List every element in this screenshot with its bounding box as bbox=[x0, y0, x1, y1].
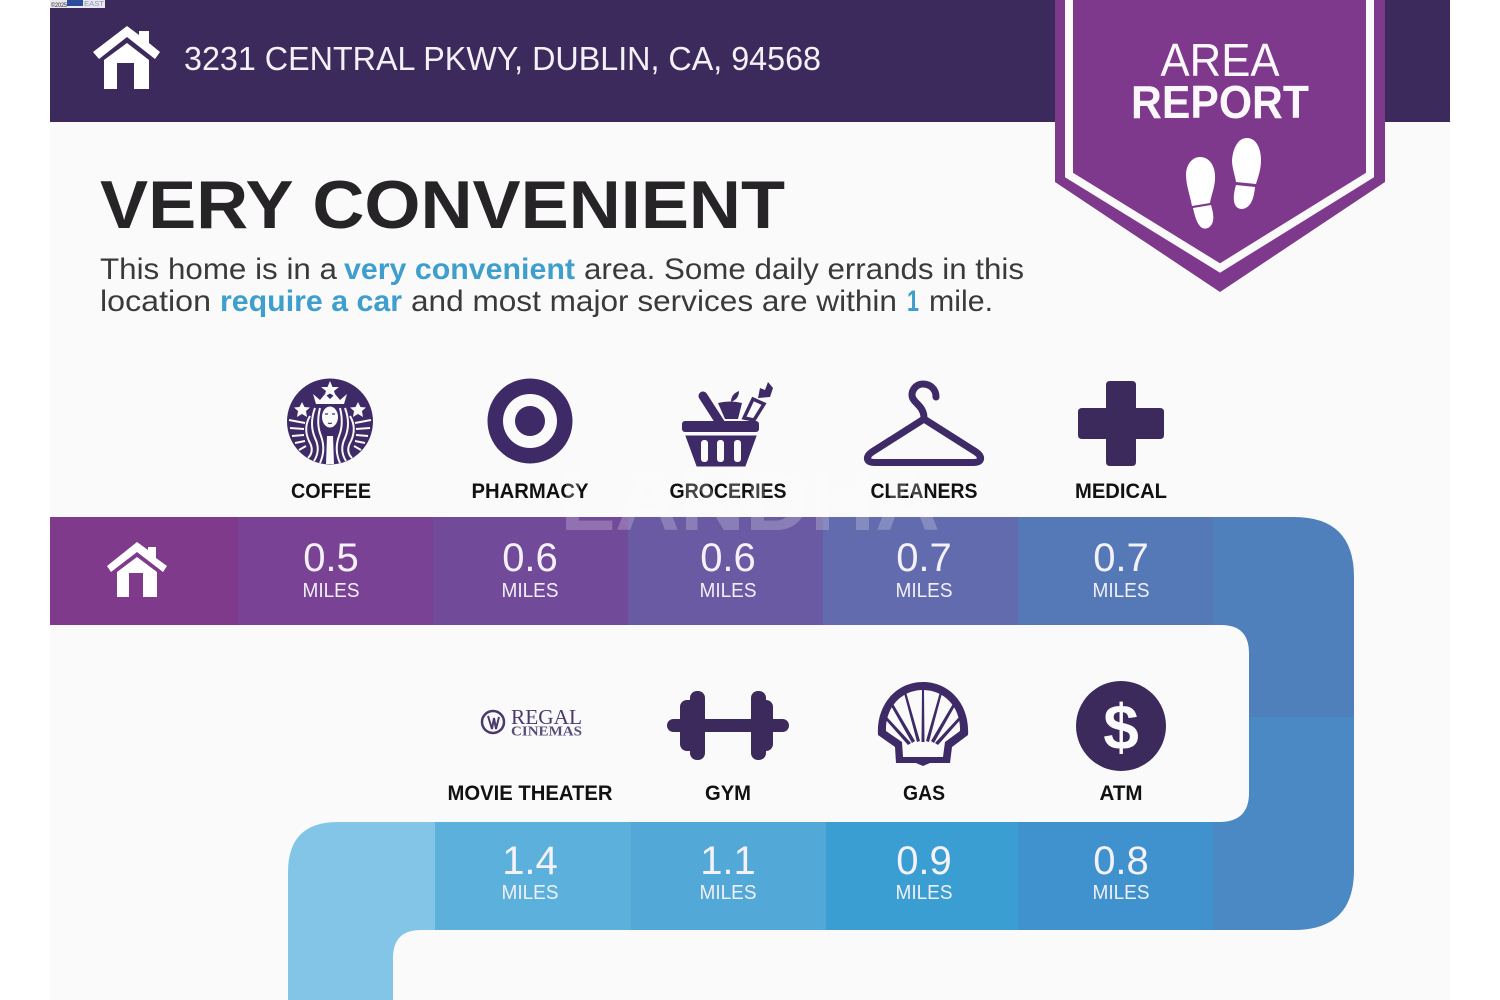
row 2 distances: 1.1 bbox=[700, 839, 756, 883]
row 2 distances: MILES bbox=[896, 882, 952, 904]
row 2 labels: MOVIE THEATER bbox=[448, 782, 612, 805]
description text: This home is in a bbox=[100, 253, 337, 286]
row 1 labels: GROCERIES bbox=[670, 480, 786, 503]
row 1 distances: MILES bbox=[700, 580, 756, 602]
row 2 distances: 1.4 bbox=[502, 839, 558, 883]
description text: mile. bbox=[929, 285, 993, 318]
icon: groceries basket bbox=[682, 382, 773, 466]
row 1 distances: MILES bbox=[896, 580, 952, 602]
description text: location bbox=[100, 285, 211, 318]
row 2 distances bbox=[502, 839, 1150, 904]
icon: home marker bbox=[107, 542, 167, 597]
icon: movie theater logo: CINEMAS bbox=[511, 724, 582, 738]
icon: movie theater logo: REGAL bbox=[511, 705, 582, 729]
copyright logo: ©2025 bbox=[51, 2, 68, 9]
row 1 distances: 0.7 bbox=[896, 536, 952, 580]
icon: footprints bbox=[1186, 138, 1261, 229]
badge text bbox=[1131, 34, 1309, 128]
header bar bbox=[50, 0, 1450, 122]
icon: atm dollar bbox=[1076, 681, 1166, 771]
row 1 distances bbox=[302, 536, 1150, 602]
icon: gym dumbbell bbox=[667, 691, 789, 760]
badge: area report bbox=[1055, 0, 1385, 292]
icon: gas shell bbox=[878, 682, 968, 766]
row 1 labels: MEDICAL bbox=[1075, 480, 1167, 503]
address: 3231 CENTRAL PKWY, DUBLIN, CA, 94568 bbox=[184, 40, 821, 77]
row 1 distances: 0.5 bbox=[303, 536, 359, 580]
row 1 distances: 0.6 bbox=[700, 536, 756, 580]
description text: area. Some daily errands in this bbox=[584, 253, 1024, 286]
description text: require a car bbox=[220, 285, 402, 318]
icon: hanger bbox=[867, 384, 981, 462]
row 1 labels bbox=[291, 480, 1167, 503]
title: VERY CONVENIENT bbox=[100, 167, 785, 243]
row 2 labels: ATM bbox=[1100, 782, 1142, 805]
description text: and most major services are within bbox=[411, 285, 897, 318]
row 2 labels bbox=[448, 782, 1142, 805]
row 2 distances: MILES bbox=[1092, 882, 1150, 904]
description text: 1 bbox=[907, 285, 919, 318]
description text bbox=[100, 253, 1024, 318]
description text: very convenient bbox=[344, 253, 575, 286]
row 1 distances: 0.7 bbox=[1093, 536, 1149, 580]
copyright logo bbox=[50, 0, 105, 9]
distance path ribbon bbox=[50, 517, 1354, 1000]
copyright logo: EAST bbox=[84, 1, 105, 8]
icon: movie theater logo bbox=[482, 705, 582, 738]
row 2 labels: GYM bbox=[705, 782, 751, 805]
badge text: REPORT bbox=[1131, 76, 1309, 128]
row 2 labels: GAS bbox=[903, 782, 945, 805]
icon: pharmacy target bbox=[488, 378, 572, 464]
badge text: AREA bbox=[1160, 34, 1280, 86]
row 1 labels: PHARMACY bbox=[472, 480, 588, 503]
row 1 distances: MILES bbox=[502, 580, 558, 602]
watermark: LANDHA bbox=[560, 454, 940, 548]
row 2 distances: MILES bbox=[700, 882, 756, 904]
icon: coffee logo bbox=[287, 378, 373, 464]
icon: house bbox=[93, 26, 160, 89]
icon: medical cross bbox=[1078, 381, 1164, 466]
row 1 distances: 0.6 bbox=[502, 536, 558, 580]
icon: atm dollar: $ bbox=[1103, 691, 1139, 763]
row 2 distances: 0.8 bbox=[1093, 839, 1149, 883]
row 1 distances: MILES bbox=[1092, 580, 1150, 602]
row 1 labels: COFFEE bbox=[291, 480, 371, 503]
row 2 distances: 0.9 bbox=[896, 839, 952, 883]
row 2 distances: MILES bbox=[502, 882, 558, 904]
row 1 distances: MILES bbox=[302, 580, 360, 602]
row 1 labels: CLEANERS bbox=[870, 480, 978, 503]
